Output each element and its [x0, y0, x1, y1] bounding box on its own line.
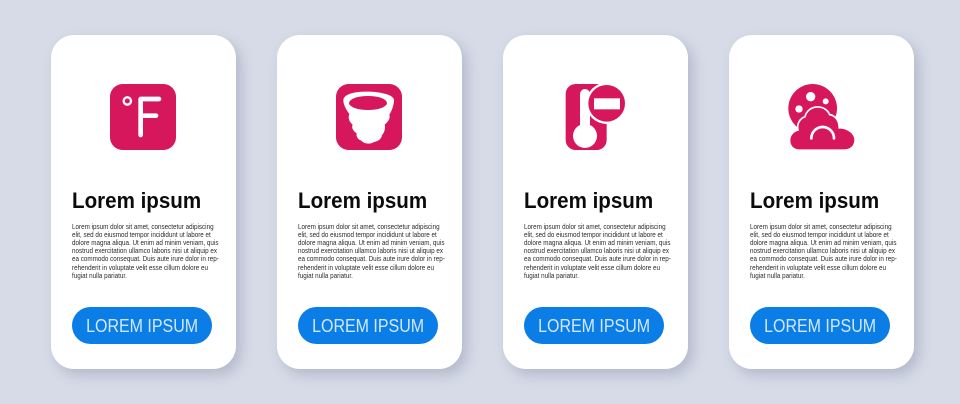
heading: Lorem ipsum	[72, 188, 201, 213]
text block: elit, sed do eiusmod tempor incididunt ut labore et	[524, 230, 663, 239]
icon: tornado square	[336, 84, 402, 150]
button	[524, 306, 664, 344]
panel: card 1 Fahrenheit	[51, 35, 236, 369]
text block	[524, 222, 671, 280]
text block: Lorem ipsum dolor sit amet, consectetur adipiscing	[750, 222, 892, 230]
text block: ea commodo consequat. Duis aute irure dolor in rep-	[72, 254, 219, 263]
heading: Lorem ipsum	[750, 188, 879, 213]
text block: elit, sed do eiusmod tempor incididunt ut labore et	[298, 230, 437, 239]
panel: card 3 thermometer	[503, 35, 688, 369]
text block: rehenderit in voluptate velit esse cillum dolore eu	[298, 263, 434, 272]
text block: nostrud exercitation ullamco laboris nisi ut aliquip ex	[72, 246, 217, 255]
heading: Lorem ipsum	[524, 188, 653, 213]
button: LOREM IPSUM	[764, 314, 876, 336]
button: LOREM IPSUM	[312, 314, 424, 336]
text block: nostrud exercitation ullamco laboris nisi ut aliquip ex	[750, 246, 895, 255]
text block	[298, 222, 445, 280]
panel: card 4 moon and cloud	[729, 35, 914, 369]
text block: Lorem ipsum dolor sit amet, consectetur adipiscing	[298, 222, 440, 230]
text block: elit, sed do eiusmod tempor incididunt ut labore et	[72, 230, 211, 239]
text block: rehenderit in voluptate velit esse cillum dolore eu	[72, 263, 208, 272]
text block: ea commodo consequat. Duis aute irure dolor in rep-	[750, 254, 897, 263]
text block: ea commodo consequat. Duis aute irure dolor in rep-	[524, 254, 671, 263]
icon: thermometer with minus badge	[566, 84, 625, 150]
text block: elit, sed do eiusmod tempor incididunt ut labore et	[750, 230, 889, 239]
button: LOREM IPSUM	[86, 314, 198, 336]
text block: dolore magna aliqua. Ut enim ad minim veniam, quis	[524, 238, 670, 247]
text block: Lorem ipsum dolor sit amet, consectetur adipiscing	[72, 222, 214, 230]
text block: dolore magna aliqua. Ut enim ad minim veniam, quis	[298, 238, 444, 247]
text block: Lorem ipsum dolor sit amet, consectetur adipiscing	[524, 222, 666, 230]
text block: nostrud exercitation ullamco laboris nisi ut aliquip ex	[298, 246, 443, 255]
text block: nostrud exercitation ullamco laboris nisi ut aliquip ex	[524, 246, 669, 255]
text block: dolore magna aliqua. Ut enim ad minim veniam, quis	[72, 238, 218, 247]
button	[750, 306, 890, 344]
button	[298, 306, 438, 344]
text block: rehenderit in voluptate velit esse cillum dolore eu	[524, 263, 660, 272]
text block: fugiat nulla pariatur.	[298, 271, 353, 280]
heading: Lorem ipsum	[298, 188, 427, 213]
text block: fugiat nulla pariatur.	[524, 271, 579, 280]
button	[72, 306, 212, 344]
text block	[72, 222, 219, 280]
text block: fugiat nulla pariatur.	[72, 271, 127, 280]
button: LOREM IPSUM	[538, 314, 650, 336]
text block: ea commodo consequat. Duis aute irure dolor in rep-	[298, 254, 445, 263]
icon: moon behind cloud	[788, 84, 854, 150]
text block: fugiat nulla pariatur.	[750, 271, 805, 280]
text block	[750, 222, 897, 280]
icon: Fahrenheit degree square	[110, 84, 176, 150]
panel: card 2 tornado	[277, 35, 462, 369]
text block: dolore magna aliqua. Ut enim ad minim veniam, quis	[750, 238, 896, 247]
text block: rehenderit in voluptate velit esse cillum dolore eu	[750, 263, 886, 272]
